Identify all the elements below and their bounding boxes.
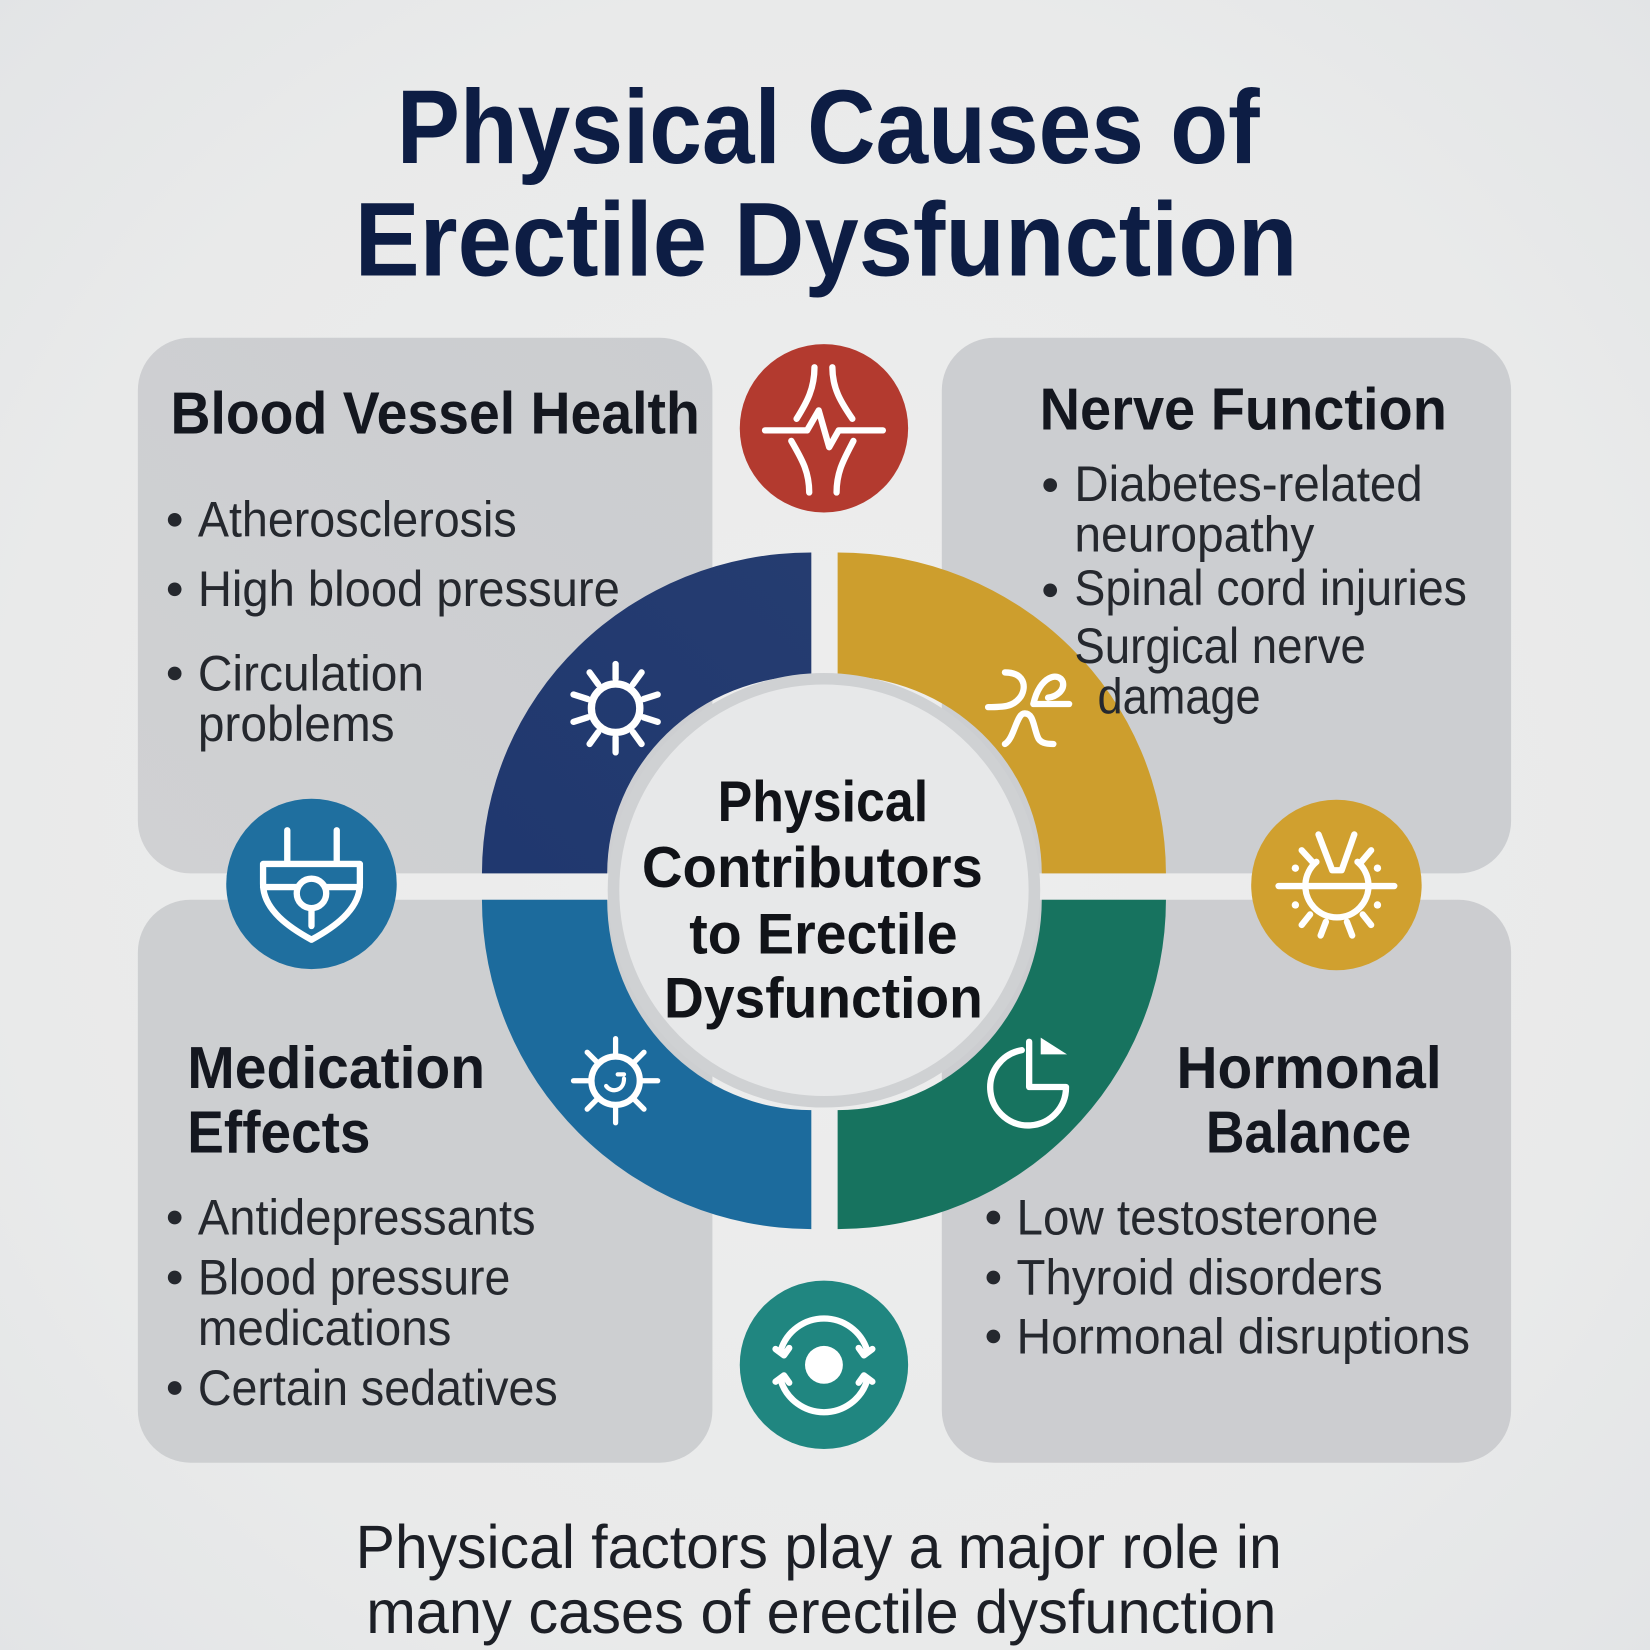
list: medications: Certain sedatives (198, 1359, 558, 1416)
icon: red blood vessel pulse (740, 344, 908, 512)
icon: blue sun with face (574, 1039, 658, 1123)
text: nerve function (1040, 377, 1467, 724)
list: nerve causes: damage (1098, 667, 1261, 724)
text: medication effects (168, 1036, 558, 1416)
text: blood vessel health (168, 382, 700, 752)
centre disc (613, 679, 1034, 1102)
list: medications: Antidepressants (198, 1188, 536, 1245)
ring segment: gold (838, 552, 1166, 873)
list: blood vessel causes (168, 491, 620, 752)
icon: gold nerve squiggle (988, 672, 1069, 744)
list: medications: Blood pressure (198, 1248, 510, 1305)
title (355, 69, 1297, 299)
centre label: Contributors (642, 836, 983, 900)
title: Physical Causes of (397, 69, 1260, 186)
panel: nerve function background (942, 338, 1511, 873)
title: Erectile Dysfunction (355, 182, 1297, 299)
central ring chart (482, 552, 1166, 1229)
list: nerve causes: neuropathy (1074, 505, 1315, 562)
heading: hormonal balance: Balance (1206, 1100, 1411, 1165)
footer statement: Physical factors play a major role in (356, 1513, 1282, 1581)
heading: blood vessel health: Blood Vessel Health (170, 382, 700, 447)
icon: navy sun (574, 664, 658, 752)
list: nerve causes (1043, 455, 1467, 724)
heading: hormonal balance (1176, 1036, 1442, 1165)
text: hormonal balance (987, 1036, 1470, 1364)
centre label: Dysfunction (664, 967, 983, 1031)
ring segment: navy (482, 552, 811, 873)
list: nerve causes: Spinal cord injuries (1074, 559, 1467, 616)
centre label: Physical (718, 770, 928, 834)
icon: blue plug shield (226, 799, 397, 969)
ring segment: green (838, 900, 1166, 1229)
list: blood vessel causes: High blood pressure (198, 560, 620, 617)
list: hormonal causes: Thyroid disorders (1017, 1248, 1383, 1305)
list: medications (168, 1188, 558, 1416)
heading: medication effects (187, 1036, 485, 1165)
list: blood vessel causes: Circulation (198, 644, 424, 701)
list: medications: medications (198, 1299, 451, 1356)
centre label: to Erectile (689, 902, 958, 966)
centre label (642, 770, 983, 1031)
panel: medication effects background (138, 900, 712, 1463)
list: hormonal causes: Low testosterone (1017, 1188, 1379, 1245)
ring segment: blue (482, 900, 811, 1229)
icon: teal cycle arrows (740, 1281, 908, 1449)
footer statement: many cases of erectile dysfunction (366, 1578, 1276, 1646)
heading: medication effects: Effects (187, 1100, 370, 1165)
footer statement (356, 1513, 1282, 1646)
list: nerve causes: Diabetes-related (1074, 455, 1423, 512)
list: hormonal causes: Hormonal disruptions (1017, 1307, 1470, 1364)
heading: hormonal balance: Hormonal (1176, 1036, 1442, 1101)
panel: blood vessel health background (138, 338, 712, 873)
icon: green pie chart (990, 1038, 1067, 1125)
panel: hormonal balance background (942, 900, 1511, 1463)
heading: nerve function: Nerve Function (1040, 377, 1447, 442)
list: blood vessel causes: problems (198, 695, 395, 752)
list: blood vessel causes: Atherosclerosis (198, 491, 517, 548)
list: nerve causes: Surgical nerve (1074, 617, 1366, 674)
icon: gold hormone sun (1251, 800, 1422, 970)
list: hormonal causes (987, 1188, 1470, 1364)
heading: medication effects: Medication (187, 1036, 485, 1101)
